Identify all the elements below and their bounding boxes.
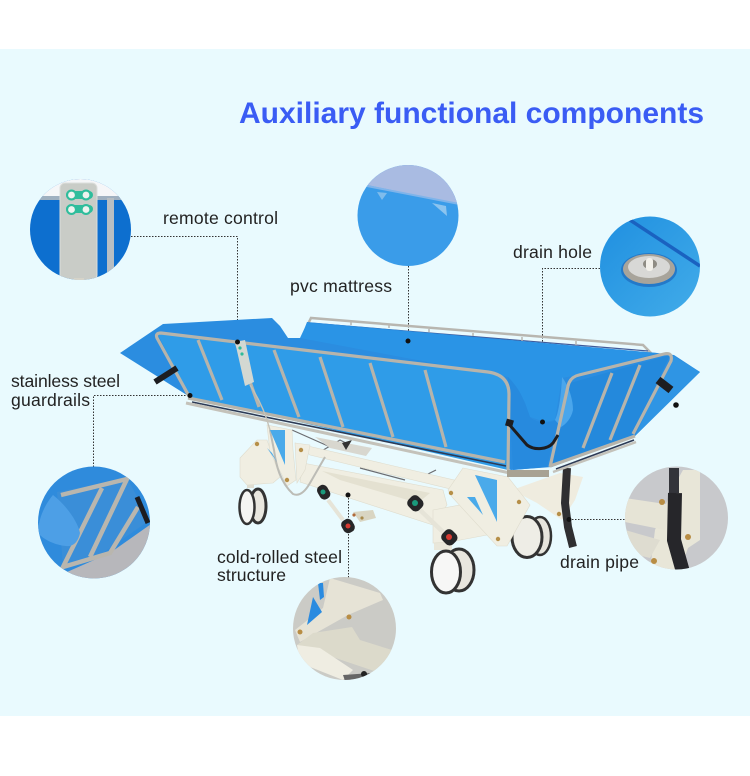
blue side plates (267, 430, 497, 522)
front wheel (432, 535, 474, 593)
right end panel (552, 355, 670, 466)
circle: remote control detail (30, 179, 131, 283)
label: drain pipe: drain pipe (560, 552, 639, 572)
right lower silver rail (553, 442, 636, 472)
handset body (60, 183, 97, 283)
label: pvc mattress: pvc mattress (290, 276, 392, 296)
near guardrail (156, 333, 509, 470)
inner mattress surface (300, 323, 657, 422)
bolts (255, 442, 561, 541)
label: cold-rolled steel structure: structure (217, 565, 286, 585)
dotted leader lines (94, 236, 626, 578)
rear leg (512, 473, 583, 520)
drain corner pocket (508, 377, 573, 470)
silver joints (507, 470, 549, 477)
left wheel (240, 482, 266, 524)
rear wheel (512, 516, 551, 558)
label: drain hole: drain hole (513, 242, 592, 262)
circle: pvc mattress detail (357, 165, 459, 267)
label: remote control: remote control (163, 208, 278, 228)
pedal levers (315, 483, 460, 548)
lower dark rail (192, 402, 506, 466)
circle: cold-rolled steel structure detail (293, 577, 397, 681)
lower silver rail (186, 403, 510, 473)
label: stainless steel guardrails: stainless steel (11, 371, 120, 391)
circle: drain pipe detail (625, 466, 729, 572)
folded corner (38, 495, 80, 546)
black straps (155, 368, 671, 449)
circle: drain hole detail (600, 216, 700, 317)
handset cable (270, 430, 325, 495)
mechanism block (315, 437, 479, 527)
circle: stainless steel guardrail detail (38, 466, 151, 579)
bed illustration (120, 318, 700, 593)
right guardrail (550, 354, 671, 467)
drain pipe hose (565, 468, 573, 547)
cream base frame (240, 425, 530, 546)
right rail dark edge and silver (556, 440, 634, 469)
label: stainless steel guardrails (11, 371, 120, 410)
label: stainless steel guardrails: guardrails (11, 390, 90, 410)
title: Auxiliary functional components (239, 97, 704, 130)
tray recess (322, 471, 430, 503)
right wing highlight (635, 355, 700, 436)
far side rail (308, 318, 652, 354)
near side panel (157, 333, 509, 470)
anchor dots (188, 338, 679, 522)
handset on rail (235, 340, 270, 430)
under-deck mechanism (292, 430, 436, 480)
label: cold-rolled steel structure (217, 547, 342, 585)
label: cold-rolled steel structure: cold-rolled steel (217, 547, 342, 567)
mattress body (120, 318, 700, 470)
